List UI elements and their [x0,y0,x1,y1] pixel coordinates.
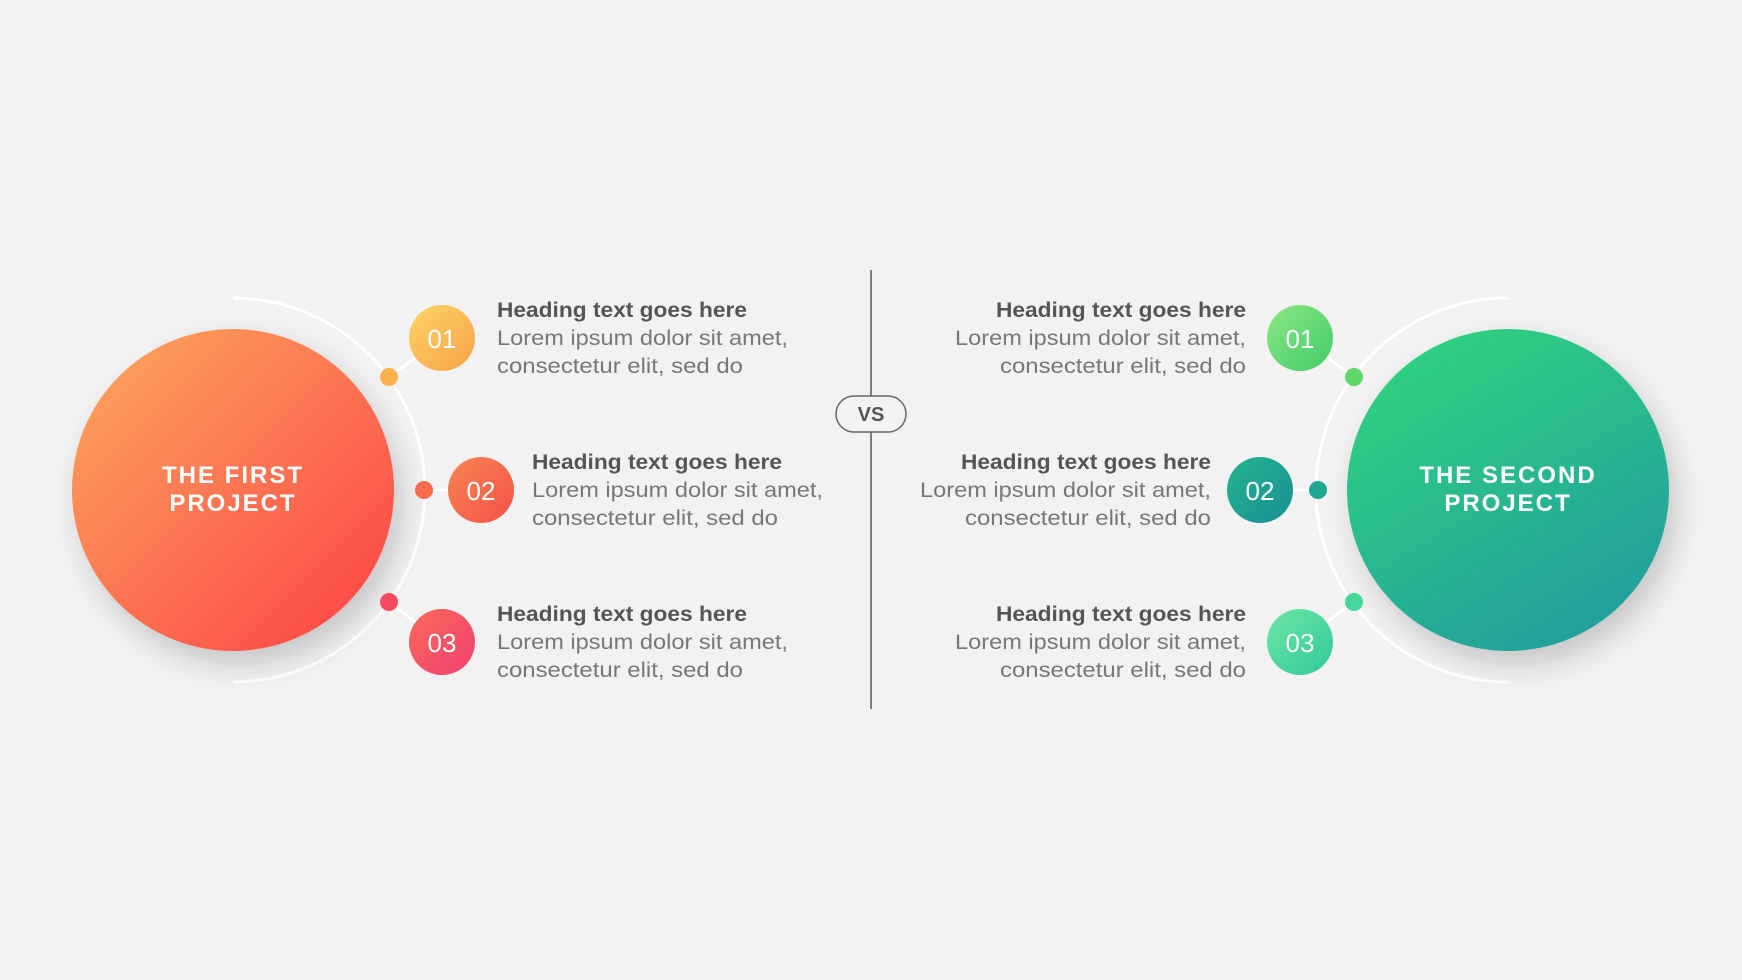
badge 01 left: 01 [428,324,456,354]
text item 2 left: Heading text goes here [532,451,782,474]
connectors right [1260,338,1354,642]
big circle right: PROJECT [1444,490,1572,517]
arc right [1316,298,1508,682]
big circle right: THE SECOND [1419,462,1597,489]
text item 1 left: consectetur elit, sed do [497,355,743,378]
text item 2 left: Lorem ipsum dolor sit amet, [532,479,823,502]
text item 3 right: Lorem ipsum dolor sit amet, [955,631,1246,654]
text item 3 left: Lorem ipsum dolor sit amet, [497,631,788,654]
badge 03 left: 03 [428,628,456,658]
text item 2 right: Heading text goes here [961,451,1211,474]
text item 1 left: Heading text goes here [497,299,747,322]
text item 1 left [497,299,788,378]
text item 3 left [497,603,788,682]
badge 02 left: 02 [467,476,495,506]
dots right [1309,368,1363,611]
text item 2 right [920,451,1211,530]
panel: first project [72,298,823,682]
text item 2 left [532,451,823,530]
text item 3 right: consectetur elit, sed do [1000,659,1246,682]
dots left [380,368,433,611]
text item 1 right [955,299,1246,378]
badge 01 left [409,305,475,371]
badge 03 right [1267,609,1333,675]
text item 1 right: Heading text goes here [996,299,1246,322]
badge 01 right [1267,305,1333,371]
text item 1 right: consectetur elit, sed do [1000,355,1246,378]
badge 02 right: 02 [1246,476,1274,506]
text item 2 right: Lorem ipsum dolor sit amet, [920,479,1211,502]
text item 2 left: consectetur elit, sed do [532,507,778,530]
text item 1 left: Lorem ipsum dolor sit amet, [497,327,788,350]
big circle left: THE FIRST [162,462,304,489]
text item 3 left: consectetur elit, sed do [497,659,743,682]
badge 02 left [448,457,514,523]
big circle right [1347,329,1669,651]
text item 3 right: Heading text goes here [996,603,1246,626]
panel: second project [920,298,1669,682]
text item 2 right: consectetur elit, sed do [965,507,1211,530]
text item 3 left: Heading text goes here [497,603,747,626]
divider line [870,270,872,709]
badge 01 right: 01 [1286,324,1314,354]
big circle left: PROJECT [169,490,297,517]
big circle left [72,329,394,651]
connectors left [389,338,481,642]
text item 1 right: Lorem ipsum dolor sit amet, [955,327,1246,350]
badge 02 right [1227,457,1293,523]
vs badge: VS [858,404,884,426]
arc left [233,298,425,682]
vs badge [836,396,906,432]
badge 03 left [409,609,475,675]
badge 03 right: 03 [1286,628,1314,658]
text item 3 right [955,603,1246,682]
